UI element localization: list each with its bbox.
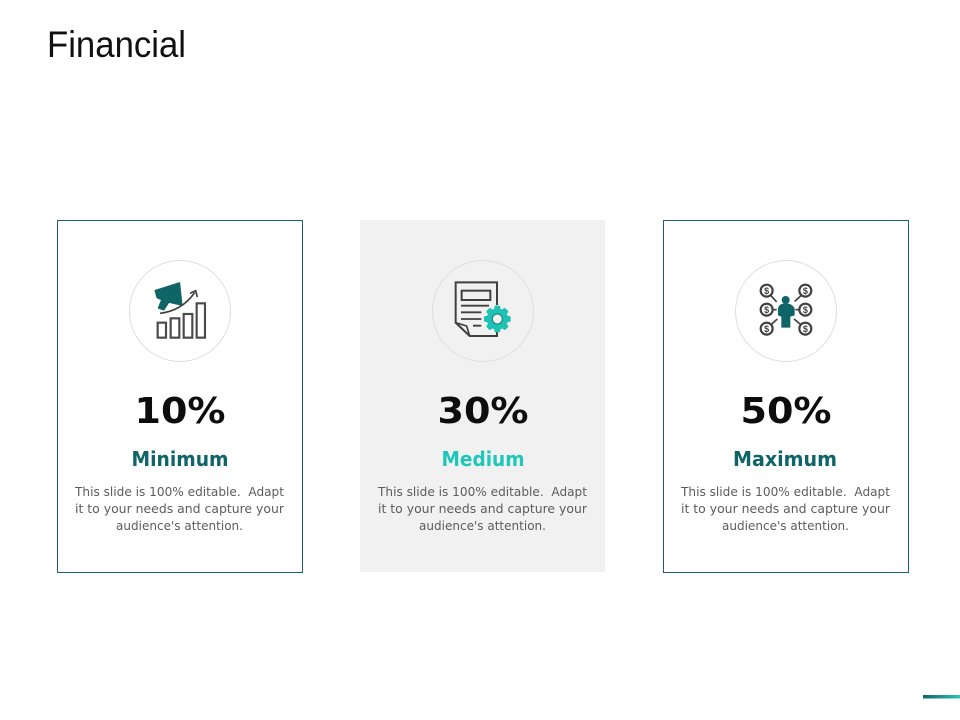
title: Financial xyxy=(47,24,186,65)
description: it to your needs and capture your xyxy=(75,501,285,516)
icon: person with dollar coins xyxy=(736,260,836,362)
icon: person with dollar coins: $ xyxy=(803,305,808,315)
accent bar xyxy=(923,695,960,698)
icon: person with dollar coins: $ xyxy=(764,305,769,315)
panel: minimum xyxy=(58,220,302,572)
icon: document and gear xyxy=(432,260,534,362)
description xyxy=(680,484,891,533)
icon: person with dollar coins: $ xyxy=(764,286,769,296)
label: Maximum xyxy=(733,447,837,471)
percentage: 10% xyxy=(134,391,226,432)
icon: megaphone and rising bars xyxy=(130,260,230,362)
description: audience's attention. xyxy=(419,518,546,533)
percentage: 50% xyxy=(740,391,832,432)
percentage: 30% xyxy=(438,391,528,432)
panel: medium xyxy=(360,220,605,572)
description: This slide is 100% editable. Adapt xyxy=(680,484,890,499)
description: audience's attention. xyxy=(722,518,849,533)
description xyxy=(377,484,588,533)
description: audience's attention. xyxy=(116,518,243,533)
description: it to your needs and capture your xyxy=(378,501,588,516)
description: This slide is 100% editable. Adapt xyxy=(377,484,587,499)
label: Minimum xyxy=(132,447,228,471)
label: Medium xyxy=(442,447,524,471)
description: This slide is 100% editable. Adapt xyxy=(74,484,284,499)
icon: person with dollar coins: $ xyxy=(803,286,808,296)
panel: maximum xyxy=(664,220,908,572)
description xyxy=(74,484,285,533)
icon: person with dollar coins: $ xyxy=(764,324,769,334)
description: it to your needs and capture your xyxy=(681,501,891,516)
icon: person with dollar coins: $ xyxy=(803,324,808,334)
